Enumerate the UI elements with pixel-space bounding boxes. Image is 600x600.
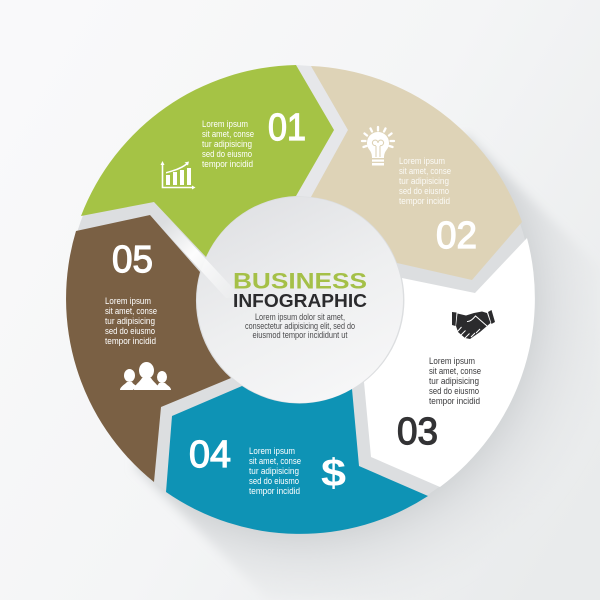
icon: bar chart: [160, 161, 196, 190]
text block 01: sit amet, conse: [202, 129, 254, 140]
text block 04: sit amet, conse: [249, 456, 301, 467]
text block 04: [249, 446, 301, 497]
gap between panels 01 and 02: [296, 65, 348, 197]
icon: people: [120, 362, 171, 390]
text block 01: tur adipisicing: [202, 139, 252, 150]
text block 02: sed do eiusmo: [399, 186, 449, 197]
text block 04: sed do eiusmo: [249, 476, 299, 487]
number 01: 01: [268, 107, 306, 149]
panel 03: white: [364, 238, 535, 487]
text block 05: [105, 296, 157, 347]
panel 02: tan: [311, 66, 522, 280]
icon: light bulb: [362, 127, 394, 166]
text block 02: sit amet, conse: [399, 166, 451, 177]
text block 04: Lorem ipsum: [249, 446, 295, 457]
text block 02: [399, 156, 451, 207]
text block 05: sit amet, conse: [105, 306, 157, 317]
text block 03: tur adipisicing: [429, 376, 479, 387]
text block 03: sit amet, conse: [429, 366, 481, 377]
text block 03: Lorem ipsum: [429, 356, 475, 367]
center circle: [197, 197, 403, 403]
number 03: 03: [397, 411, 438, 453]
icon: dollar sign: $: [321, 452, 346, 495]
text block 03: sed do eiusmo: [429, 386, 479, 397]
center description: [245, 312, 355, 340]
text block 01: tempor incidid: [202, 159, 253, 170]
text block 01: sed do eiusmo: [202, 149, 252, 160]
center description: Lorem ipsum dolor sit amet,: [255, 312, 345, 322]
panel 04: blue: [166, 386, 428, 534]
text block 04: tur adipisicing: [249, 466, 299, 477]
text block 05: tempor incidid: [105, 336, 156, 347]
text block 05: sed do eiusmo: [105, 326, 155, 337]
panel 05: brown: [66, 215, 231, 482]
center description: consectetur adipisicing elit, sed do: [245, 321, 355, 331]
text block 03: [429, 356, 481, 407]
text block 02: tur adipisicing: [399, 176, 449, 187]
heading: INFOGRAPHIC: INFOGRAPHIC: [233, 291, 367, 311]
text block 02: tempor incidid: [399, 196, 450, 207]
number 05: 05: [112, 239, 153, 281]
text block 02: Lorem ipsum: [399, 156, 445, 167]
panel 01: green: [81, 65, 334, 257]
text block 05: tur adipisicing: [105, 316, 155, 327]
text block 05: Lorem ipsum: [105, 296, 151, 307]
long shadow of the ring: [134, 134, 600, 600]
highlight streak through the gap: [150, 203, 242, 298]
center description: eiusmod tempor incididunt ut: [252, 330, 348, 340]
icon: handshake: [452, 310, 495, 339]
center title and copy: [233, 268, 367, 340]
text block 03: tempor incidid: [429, 396, 480, 407]
ring base disc: [67, 67, 533, 533]
number 02: 02: [436, 215, 477, 257]
number 04: 04: [189, 434, 231, 476]
text block 01: [202, 119, 254, 170]
text block 01: Lorem ipsum: [202, 119, 248, 130]
heading: BUSINESS: BUSINESS: [233, 268, 367, 294]
text block 04: tempor incidid: [249, 486, 300, 497]
